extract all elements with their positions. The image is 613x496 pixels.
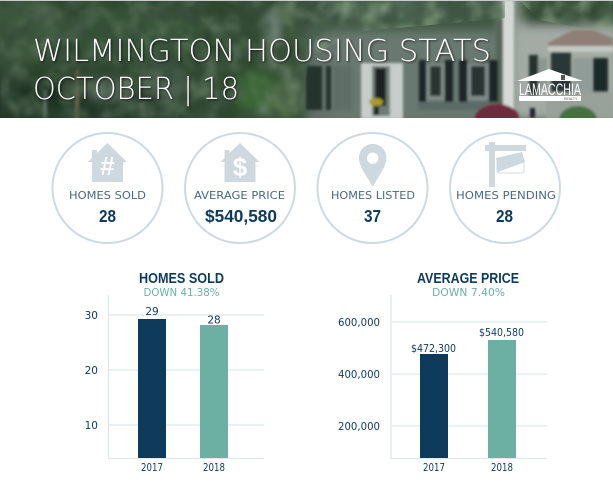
- bar: 2018: [200, 325, 228, 458]
- chart: homes sold: 10: [85, 420, 98, 432]
- chart: homes sold: 2018: [203, 462, 225, 474]
- stat: homes pending: 28: [496, 206, 513, 226]
- stat: homes listed: 37: [364, 206, 381, 226]
- chart: average price: 400,000: [338, 369, 380, 381]
- stat: homes pending: [450, 133, 560, 243]
- photo: house siding: [305, 30, 505, 125]
- title: OCTOBER | 18: [33, 72, 239, 107]
- icon: house with dollar: $: [233, 152, 248, 182]
- photo: door: [361, 63, 403, 119]
- chart: average price: 2017: [423, 462, 445, 474]
- stat: homes pending: HOMES PENDING: [456, 190, 556, 202]
- chart change label: DOWN 7.40%: [432, 287, 505, 299]
- bar: 2017: [138, 319, 166, 458]
- photo: windows and shutters: [419, 60, 426, 102]
- title: [33, 34, 491, 107]
- chart heading: HOMES SOLD: [139, 271, 224, 287]
- logo: REALTY: [564, 97, 578, 101]
- bar: 2018: [488, 340, 516, 458]
- header photo banner: [0, 0, 613, 118]
- chart: homes sold: [85, 271, 264, 474]
- chart: average price: 200,000: [338, 421, 380, 433]
- stat: homes listed: [318, 133, 428, 243]
- chart: average price: [338, 271, 547, 474]
- icon: map pin: [359, 144, 386, 187]
- chart heading: AVERAGE PRICE: [417, 271, 519, 287]
- chart: homes sold: 2017: [141, 462, 163, 474]
- stat: average price: $540,580: [205, 206, 277, 226]
- chart: homes sold: 28: [207, 314, 221, 326]
- stat: homes sold: HOMES SOLD: [69, 190, 146, 202]
- title: WILMINGTON HOUSING STATS: [33, 34, 491, 69]
- photo: porch: [529, 55, 538, 95]
- chart: homes sold: 30: [85, 310, 98, 322]
- chart: average price: $472,300: [411, 343, 456, 355]
- chart change label: DOWN 41.38%: [144, 287, 220, 299]
- bar: 2017: [420, 354, 448, 458]
- chart: average price: 600,000: [338, 317, 380, 329]
- icon: house with hash: #: [100, 151, 115, 181]
- logo: [517, 69, 583, 101]
- chart: average price: $540,580: [479, 327, 524, 339]
- stat: homes sold: 28: [99, 206, 116, 226]
- stat: average price: AVERAGE PRICE: [194, 190, 285, 202]
- stat: average price: [185, 133, 295, 243]
- stat: homes listed: HOMES LISTED: [331, 190, 415, 202]
- chart: homes sold: 20: [85, 365, 98, 377]
- photo: shrubs: [474, 102, 521, 118]
- chart: homes sold: 29: [145, 306, 159, 318]
- chart: average price: 2018: [491, 462, 513, 474]
- photo: foliage texture: [0, 0, 613, 118]
- icon: for sale sign: [485, 142, 526, 187]
- stat: homes sold: [52, 133, 162, 243]
